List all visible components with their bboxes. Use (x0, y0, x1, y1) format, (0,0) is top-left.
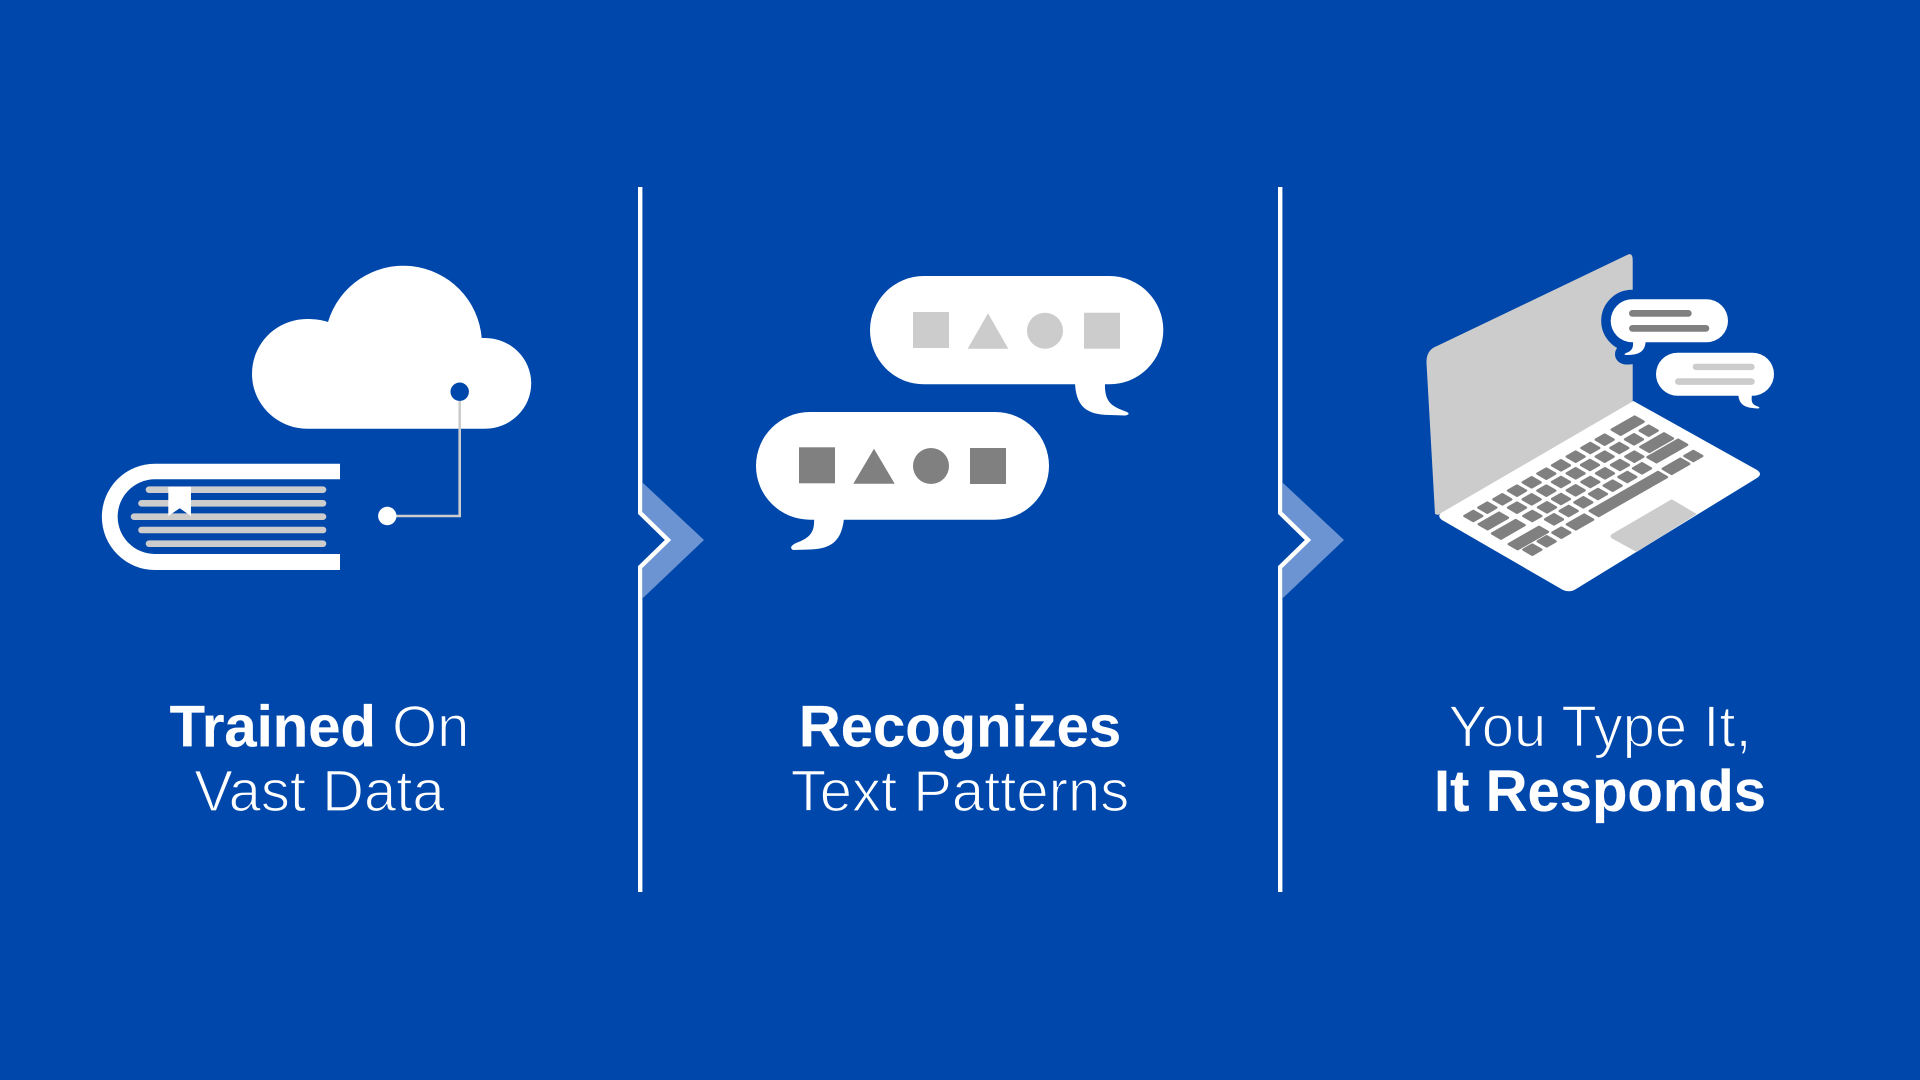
lower bubble (756, 412, 1049, 550)
bookmark (168, 487, 191, 516)
heading: step 2 (791, 695, 1129, 824)
laptop screen (1426, 254, 1633, 515)
divider with chevron arrow 2 (1280, 187, 1344, 892)
heading: step 2: Text Patterns (791, 759, 1129, 824)
cloud node (450, 382, 469, 401)
icon: cloud connected to book (102, 266, 531, 570)
upper bubble (870, 276, 1163, 416)
keyboard (1464, 417, 1702, 555)
heading: step 3: You Type It, (1448, 695, 1752, 760)
icon: speech bubbles with shapes (756, 276, 1163, 550)
book cover (102, 464, 340, 570)
book node (378, 507, 396, 525)
chat bubble 1 (1611, 299, 1728, 355)
icon: laptop with chat bubbles (1426, 254, 1774, 591)
trackpad (1610, 499, 1697, 552)
chat bubble 2 (1656, 353, 1774, 408)
book pages (134, 490, 323, 544)
heading: step 3: It Responds (1434, 759, 1766, 824)
connector line (387, 392, 460, 516)
heading: step 3 (1434, 695, 1766, 824)
heading: step 2: Recognizes (799, 695, 1121, 760)
heading: step 1 (170, 695, 469, 824)
heading: step 1: Vast Data (194, 759, 445, 824)
heading: step 1: Trained On (170, 695, 469, 760)
laptop base (1439, 401, 1760, 591)
divider with chevron arrow 1 (640, 187, 704, 892)
cloud (252, 266, 531, 429)
